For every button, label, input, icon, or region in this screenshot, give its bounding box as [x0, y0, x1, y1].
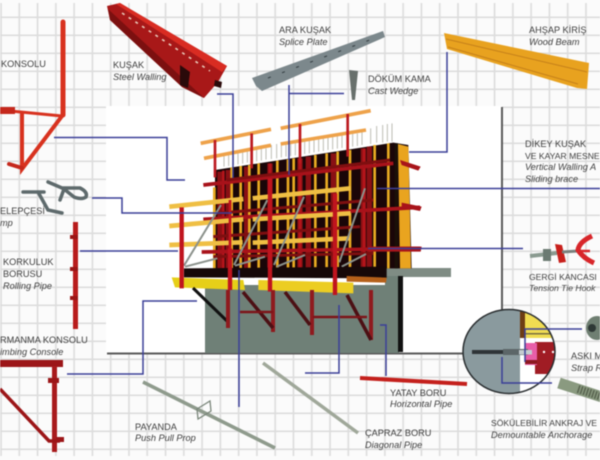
label: rolling pipe: Rolling Pipe	[3, 281, 52, 291]
label: vertical walling: DİKEY KUŞAK	[525, 139, 587, 149]
front posts	[182, 178, 335, 295]
label: climbing console	[0, 335, 88, 357]
label: climbing console: RMANMA KONSOLU	[0, 335, 88, 345]
tie hooks on panel	[368, 160, 422, 252]
label: vertical walling	[525, 139, 600, 184]
component: diagonal pipe	[263, 363, 358, 433]
concrete wall	[205, 268, 451, 353]
label: diagonal pipe: ÇAPRAZ BORU	[365, 428, 431, 438]
platform	[172, 267, 387, 293]
label: horizontal pipe: Horizontal Pipe	[390, 399, 452, 409]
label: strap	[571, 351, 600, 373]
label: steel walling: KUŞAK	[113, 60, 145, 70]
label: horizontal pipe	[390, 388, 452, 409]
label: rolling pipe: BORUSU	[3, 269, 42, 279]
component: wood beam	[444, 33, 589, 89]
label: climbing console: imbing Console	[0, 347, 63, 357]
label: splice plate	[279, 25, 332, 47]
component: console bracket	[0, 22, 63, 169]
label: clamp: ELEPÇESİ	[0, 206, 45, 216]
label: vertical walling: VE KAYAR MESNE	[525, 151, 600, 161]
label: diagonal pipe: Diagonal Pipe	[365, 440, 422, 450]
component: push pull prop	[143, 382, 275, 448]
component: tension tie hook	[530, 236, 594, 263]
label: vertical walling: Vertical Walling A	[525, 162, 596, 172]
blue leader lines	[54, 52, 600, 407]
formwork panel	[202, 123, 422, 268]
label: cast wedge: Cast Wedge	[368, 86, 418, 96]
component: rolling pipe	[70, 222, 78, 329]
label: wood beam	[529, 25, 587, 47]
label: cast wedge	[368, 74, 432, 96]
diagonal props	[184, 188, 366, 267]
label: steel walling	[113, 60, 167, 82]
label: push pull prop: Push Pull Prop	[135, 433, 196, 443]
label: splice plate: ARA KUŞAK	[279, 25, 332, 35]
label: anchorage	[491, 418, 597, 440]
label: clamp: mp	[0, 218, 13, 228]
label: push pull prop	[135, 422, 196, 443]
label: vertical walling: Sliding brace	[525, 174, 578, 184]
label: anchorage: Demountable Anchorage	[491, 430, 592, 440]
scaffold planks	[169, 188, 351, 245]
component: splice plate	[252, 31, 385, 91]
component: horizontal pipe	[360, 378, 467, 384]
detail circle: anchor section	[463, 305, 560, 400]
component: cast wedge	[349, 70, 358, 100]
component: steel walling	[107, 3, 227, 98]
label: clamp	[0, 206, 45, 228]
component: anchorage sleeve	[559, 383, 600, 397]
label: tension tie hook: GERGİ KANCASI	[529, 272, 597, 282]
component: clamp	[23, 182, 86, 213]
component: strap nut	[586, 316, 600, 340]
label: splice plate: Splice Plate	[279, 37, 328, 47]
label: anchorage: SÖKÜLEBİLİR ANKRAJ VE	[491, 418, 597, 428]
label: console: KONSOLU	[1, 59, 46, 69]
label: diagonal pipe	[365, 428, 431, 450]
label: push pull prop: PAYANDA	[135, 422, 178, 432]
label: wood beam: Wood Beam	[529, 37, 580, 47]
brackets below platform	[193, 288, 371, 340]
label: cast wedge: DÖKÜM KAMA	[368, 74, 432, 84]
main formwork structure	[169, 111, 451, 353]
label: rolling pipe: KORKULUK	[3, 257, 54, 267]
component: climbing console	[0, 360, 64, 452]
label: wood beam: AHŞAP KİRİŞ	[529, 25, 587, 35]
upper posts	[215, 114, 348, 177]
label: tension tie hook: Tension Tie Hook	[529, 283, 596, 293]
label: tension tie hook	[529, 272, 597, 293]
upper handrail planks	[201, 111, 371, 158]
label: rolling pipe	[3, 257, 54, 291]
label: horizontal pipe: YATAY BORU	[390, 388, 446, 398]
label: steel walling: Steel Walling	[113, 72, 167, 82]
